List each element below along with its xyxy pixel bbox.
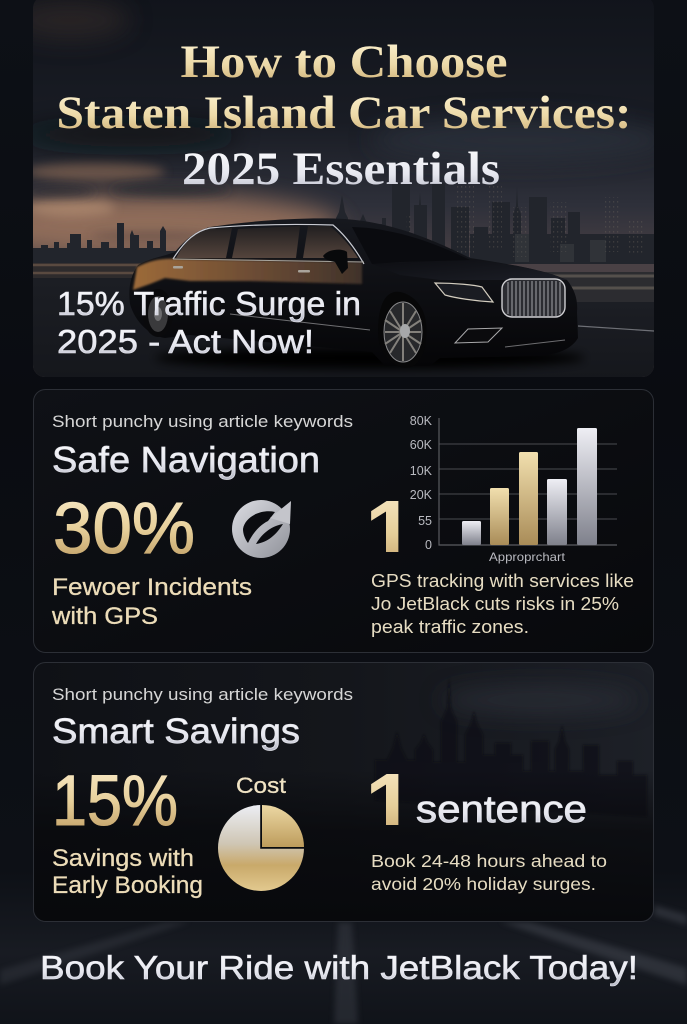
description: Jo JetBlack cuts risks in 25% [371,593,619,614]
stat label: with GPS [51,603,158,630]
hood [372,259,567,280]
pie chart: Cost [236,773,286,798]
chrome trim [173,224,364,264]
bar chart [410,414,617,564]
limousine [129,218,585,369]
hero callout: 2025 - Act Now! [57,323,314,360]
skyline [33,183,654,265]
front wheel [378,292,426,368]
call to action: Book Your Ride with JetBlack Today! [40,950,638,987]
numeral and word [371,774,586,825]
axis labels: 80K [410,414,433,428]
description: peak traffic zones. [371,616,529,637]
title [56,36,632,195]
pie chart [218,773,304,891]
panel: hero [0,0,670,378]
description: Book 24-48 hours ahead to [371,851,607,871]
faint skyline [34,677,654,922]
bars [462,428,597,545]
panel: safe navigation [34,390,654,652]
axis labels [410,414,433,552]
numeral and word: 1 [365,756,415,856]
grille [502,279,565,317]
description: avoid 20% holiday surges. [371,874,596,894]
big stat 15%: 15% [52,762,178,841]
axis labels: 0 [425,538,432,552]
headlight [435,283,493,302]
panel: smart savings [34,662,654,922]
hero callout [57,285,361,360]
windshield [352,227,470,264]
door handles [173,266,310,272]
mirror [323,250,348,274]
numeral 1: 1 [365,483,415,583]
stat label: Early Booking [52,872,203,899]
axis labels: 55 [418,514,432,528]
section tagline: Short punchy using article keywords [52,685,353,704]
section heading: Smart Savings [52,712,300,751]
icon: gauge arrow [232,500,291,558]
stat label: Fewoer Incidents [52,574,252,601]
rear wheel [143,289,173,337]
lower intake [455,328,502,343]
side windows [176,226,358,258]
guardrail [33,263,654,302]
hero scenery [0,0,670,378]
side reflection [133,259,362,290]
big stat 30%: 30% [53,489,195,569]
section tagline: Short punchy using article keywords [52,412,353,431]
title: Staten Island Car Services: [56,87,632,139]
hero callout: 15% Traffic Surge in [57,285,361,322]
section heading: Safe Navigation [52,439,320,480]
axis labels: 20K [410,488,433,502]
description: GPS tracking with services like [371,570,634,591]
axis labels: 60K [410,438,433,452]
stat label: Savings with [52,845,194,872]
title: How to Choose [180,36,508,88]
title: 2025 Essentials [182,143,500,195]
axis labels: 10K [410,464,433,478]
chart caption: Approprchart [489,550,566,564]
numeral and word: sentence [416,789,587,831]
